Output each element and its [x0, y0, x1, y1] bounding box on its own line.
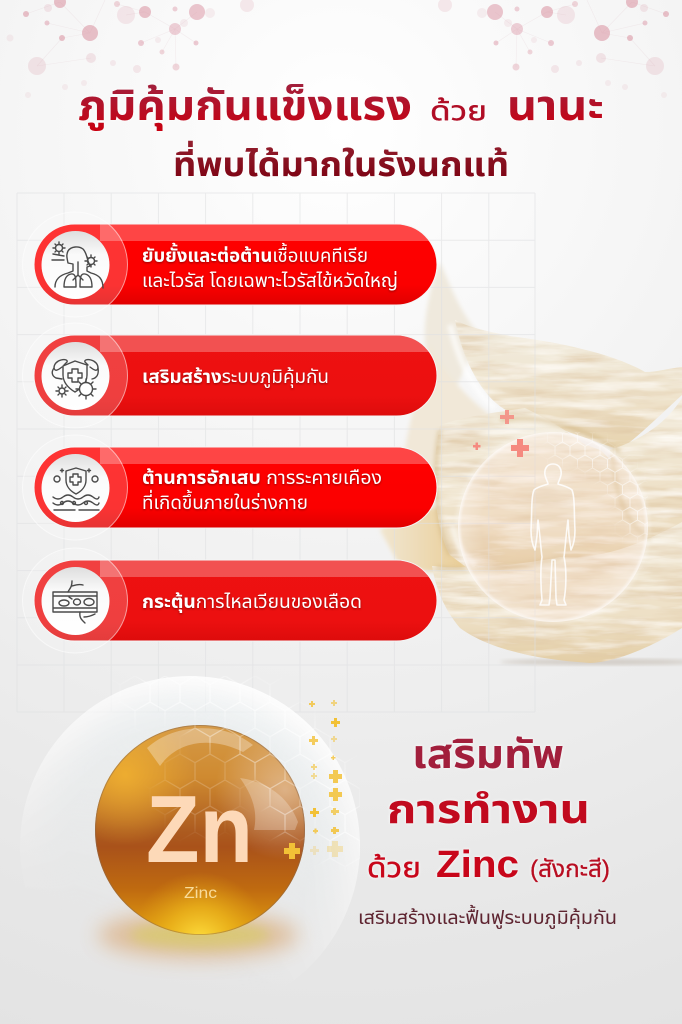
icon: lungs and virus — [52, 242, 103, 288]
human outline — [531, 464, 575, 605]
icon ring — [22, 435, 128, 540]
zinc sphere — [95, 725, 305, 935]
icon ring — [22, 212, 128, 317]
title: ที่พบได้มากในรังนกแท้ — [173, 140, 509, 184]
text: item 4: กระตุ้นการไหลเวียนของเลือด — [142, 591, 362, 613]
text: item 2: เสริมสร้างระบบภูมิคุ้มกัน — [142, 365, 329, 389]
panel: item 4 — [22, 548, 437, 653]
nest photo — [380, 262, 682, 665]
element name: Zinc — [184, 885, 217, 902]
text: item 3 — [142, 467, 382, 514]
icon ring — [22, 323, 128, 428]
icon ring — [22, 548, 128, 653]
nest: top lobe — [455, 320, 682, 450]
network decoration: top left — [6, 0, 254, 98]
nest: middle band — [458, 438, 650, 566]
shadow under zinc sphere — [98, 911, 298, 959]
zinc heading: Zinc — [436, 844, 519, 886]
body bubble — [458, 432, 648, 622]
plus marks near bubble — [473, 410, 529, 457]
zinc heading: ด้วย — [367, 852, 421, 883]
zinc subtext: เสริมสร้างและฟื้นฟูระบบภูมิคุ้มกัน — [358, 904, 617, 930]
zinc heading — [367, 733, 610, 886]
sphere highlight — [147, 728, 253, 766]
title — [78, 82, 604, 184]
nest: left lobe — [435, 408, 610, 570]
nest: right lobe — [610, 398, 682, 542]
element symbol: Zn — [146, 776, 253, 883]
grid — [17, 193, 535, 712]
hexagon shell — [549, 432, 648, 538]
soft ground shadow — [500, 659, 682, 665]
golden plus marks — [284, 700, 343, 859]
crease shadows — [436, 418, 650, 569]
panel: item 3 — [22, 435, 437, 540]
title: ด้วย — [430, 96, 487, 126]
text: item 3: ที่เกิดขึ้นภายในร่างกาย — [142, 489, 308, 514]
network decoration: top right — [438, 0, 669, 98]
icon: shield on skin — [53, 468, 99, 510]
icon: shield with muscles — [52, 360, 98, 399]
text: item 3: ต้านการอักเสบ การระคายเคือง — [142, 467, 382, 489]
text: item 1: ยับยั้งและต่อต้านเชื้อแบคทีเรีย — [142, 242, 368, 267]
icon: blood vessel — [53, 581, 97, 623]
nest: bottom lobe — [432, 522, 682, 663]
zinc heading: การทำงาน — [387, 788, 590, 832]
text: item 1: และไวรัส โดยเฉพาะไวรัสไข้หวัดใหญ่ — [142, 269, 398, 292]
white folds — [450, 325, 495, 408]
title: ภูมิคุ้มกันแข็งแรง — [78, 82, 412, 131]
hexagon shell — [154, 725, 305, 842]
panel: item 1 — [22, 212, 437, 317]
zinc heading: (สังกะสี) — [530, 856, 610, 883]
title: นานะ — [507, 82, 604, 129]
soft back lobes — [380, 262, 490, 572]
zinc heading: เสริมทัพ — [412, 733, 564, 777]
large glass bubble — [37, 676, 360, 906]
text: item 1 — [142, 242, 398, 292]
panel: item 2 — [22, 323, 437, 428]
